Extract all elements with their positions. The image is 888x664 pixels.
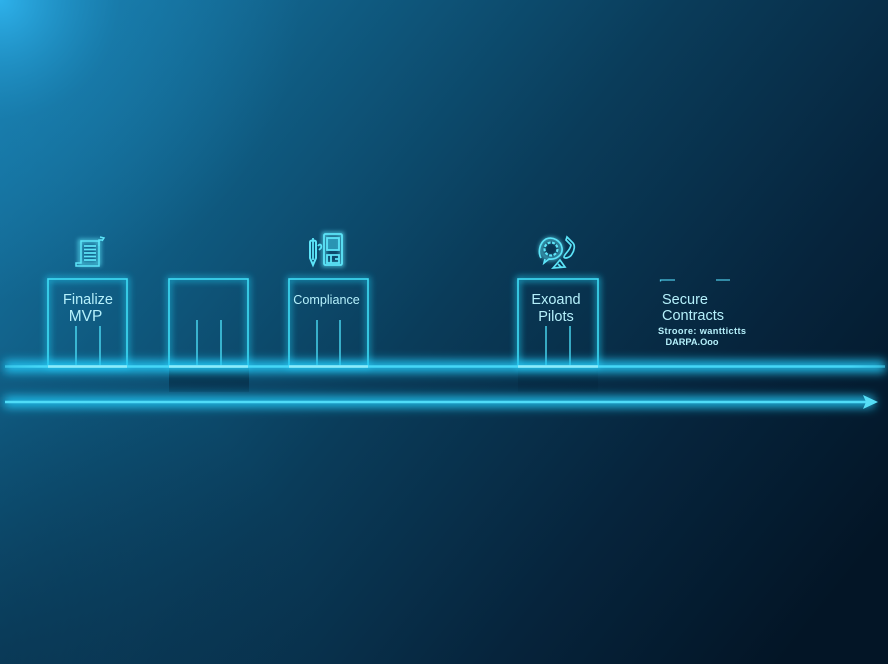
arrow line with glow [4,395,878,409]
milestone box: Expand Pilots [518,279,598,366]
label: Finalize MVP: Finalize [63,292,113,308]
shadow under fourth milestone [518,368,598,392]
shadow under second milestone [169,368,249,392]
arrowhead [863,395,878,409]
milestone: Secure Contracts (open frame) [658,280,746,347]
icon: globe chat and handset [539,237,574,268]
sub-label: Stroore: wanttictts [658,326,746,336]
milestone box: Finalize MVP [48,279,127,366]
label: Expand Pilots: Exoand [531,292,581,308]
milestone box: empty [169,279,248,366]
icon: document scroll [76,237,104,266]
milestone box: Compliance [289,279,368,366]
icon: pen and tablet [310,234,342,265]
label: Expand Pilots: Pilots [538,309,574,325]
label: Secure Contracts: Secure [662,292,708,308]
label: Compliance: Compliance [293,293,360,307]
sub-label: DARPA.Ooo [666,337,719,347]
timeline line with glow [4,361,885,372]
label: Secure Contracts: Contracts [662,308,724,324]
label: Finalize MVP: MVP [69,308,102,325]
